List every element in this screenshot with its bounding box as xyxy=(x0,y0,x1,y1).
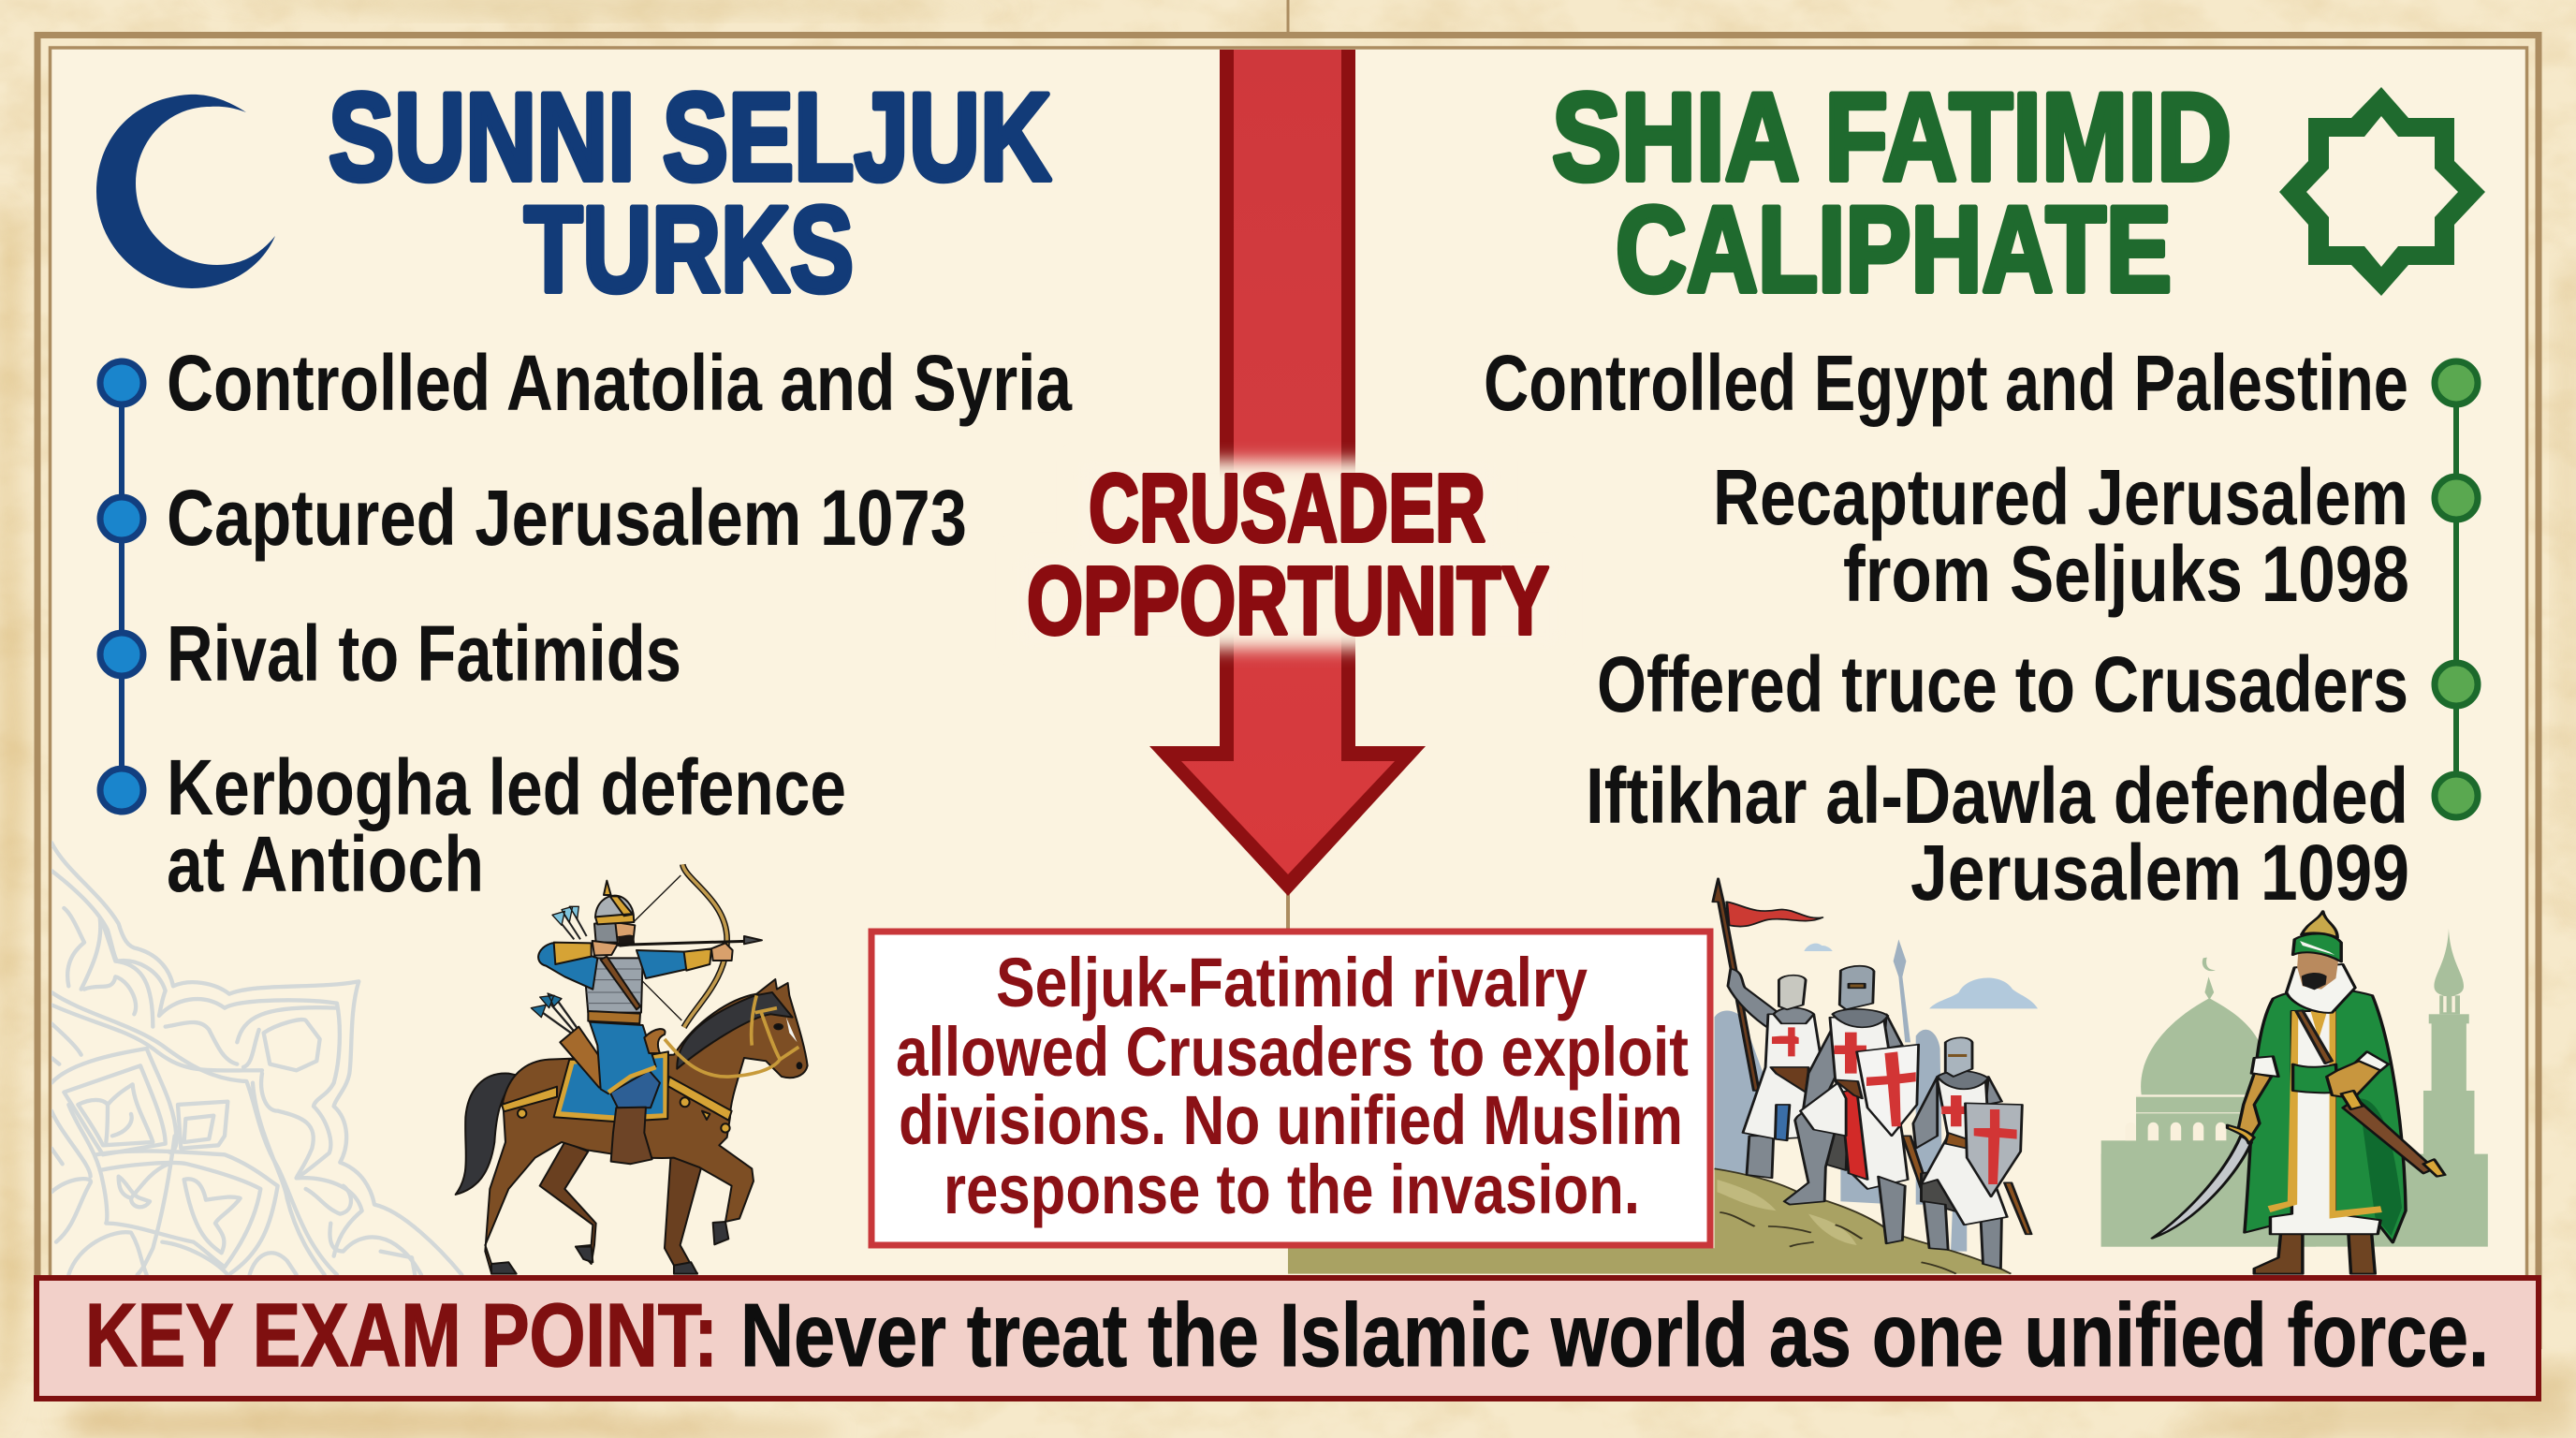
text block: Seljuk facts: at Antioch xyxy=(167,820,484,908)
text block: Seljuk facts xyxy=(167,339,1073,908)
skirt xyxy=(590,1022,656,1093)
icon: crescent moon xyxy=(96,95,275,288)
title: Shia Fatimid Caliphate: SHIA FATIMID xyxy=(1552,68,2232,207)
text block: Fatimid facts: Recaptured Jerusalem xyxy=(1713,453,2408,541)
callout box: divisions. No unified Muslim xyxy=(899,1081,1683,1159)
head xyxy=(594,920,621,943)
arrow and hands xyxy=(618,941,746,945)
knight with banner xyxy=(1713,878,1831,1178)
arrow: down the centre xyxy=(1149,50,1426,896)
quiver xyxy=(531,993,578,1033)
timeline: Seljuk bullets xyxy=(100,361,143,812)
title: Sunni Seljuk Turks xyxy=(329,68,1051,317)
background soldier silhouettes xyxy=(1715,939,1967,1252)
heading: Crusader Opportunity: OPPORTUNITY xyxy=(1027,547,1549,654)
knight with grey shield xyxy=(1913,1037,2031,1269)
illustration: hill and knights xyxy=(1288,878,2038,1274)
knight with white shield xyxy=(1784,966,1931,1243)
text block: Fatimid facts: Offered truce to Crusaders xyxy=(1597,640,2408,728)
horse xyxy=(456,1074,517,1195)
title: Sunni Seljuk Turks: TURKS xyxy=(524,181,854,317)
text block: Fatimid facts: Jerusalem 1099 xyxy=(1910,829,2409,917)
heading: Crusader Opportunity: CRUSADER xyxy=(1089,454,1486,562)
banner: key exam point xyxy=(37,1278,2539,1399)
text block: Fatimid facts: from Seljuks 1098 xyxy=(1843,530,2409,618)
illustration: Seljuk horse archer xyxy=(456,864,808,1274)
text block: Seljuk facts: Controlled Anatolia and Syria xyxy=(167,339,1073,427)
harness xyxy=(502,1087,557,1111)
text block: Seljuk facts: Rival to Fatimids xyxy=(167,609,681,697)
reins hand xyxy=(644,1029,665,1053)
small cloud xyxy=(1804,944,1833,951)
callout box: Seljuk-Fatimid rivalry xyxy=(996,944,1588,1021)
banner: key exam point: KEY EXAM POINT: xyxy=(85,1285,718,1386)
heading: Crusader Opportunity xyxy=(1016,454,1562,654)
rider legs xyxy=(608,1070,660,1108)
text block: Seljuk facts: Kerbogha led defence xyxy=(167,743,846,831)
draw arm xyxy=(538,943,597,990)
bow xyxy=(682,864,727,1027)
illustration: mosque silhouette xyxy=(2101,929,2488,1247)
callout box xyxy=(871,932,1710,1245)
rear arrows on shoulder xyxy=(555,908,587,939)
text block: Fatimid facts xyxy=(1484,339,2409,917)
title: Shia Fatimid Caliphate xyxy=(1552,68,2232,317)
callout box: response to the invasion. xyxy=(944,1151,1640,1228)
bow arm xyxy=(637,950,688,978)
hillside xyxy=(1288,1168,2011,1274)
timeline: Fatimid bullets xyxy=(2435,361,2478,817)
icon: eight-pointed star xyxy=(2279,87,2485,296)
title: Sunni Seljuk Turks: SUNNI SELJUK xyxy=(329,68,1051,207)
text block: Seljuk facts: Captured Jerusalem 1073 xyxy=(167,474,967,562)
large cloud xyxy=(1929,977,2038,1008)
saddle blanket xyxy=(554,1051,668,1122)
text block: Fatimid facts: Iftikhar al-Dawla defended xyxy=(1586,752,2408,840)
torso armour xyxy=(583,958,643,1013)
title: Shia Fatimid Caliphate: CALIPHATE xyxy=(1616,181,2172,317)
illustration: Fatimid warrior xyxy=(2152,911,2445,1274)
decorative arabesque ornament xyxy=(51,843,461,1275)
callout box: allowed Crusaders to exploit xyxy=(896,1013,1689,1091)
